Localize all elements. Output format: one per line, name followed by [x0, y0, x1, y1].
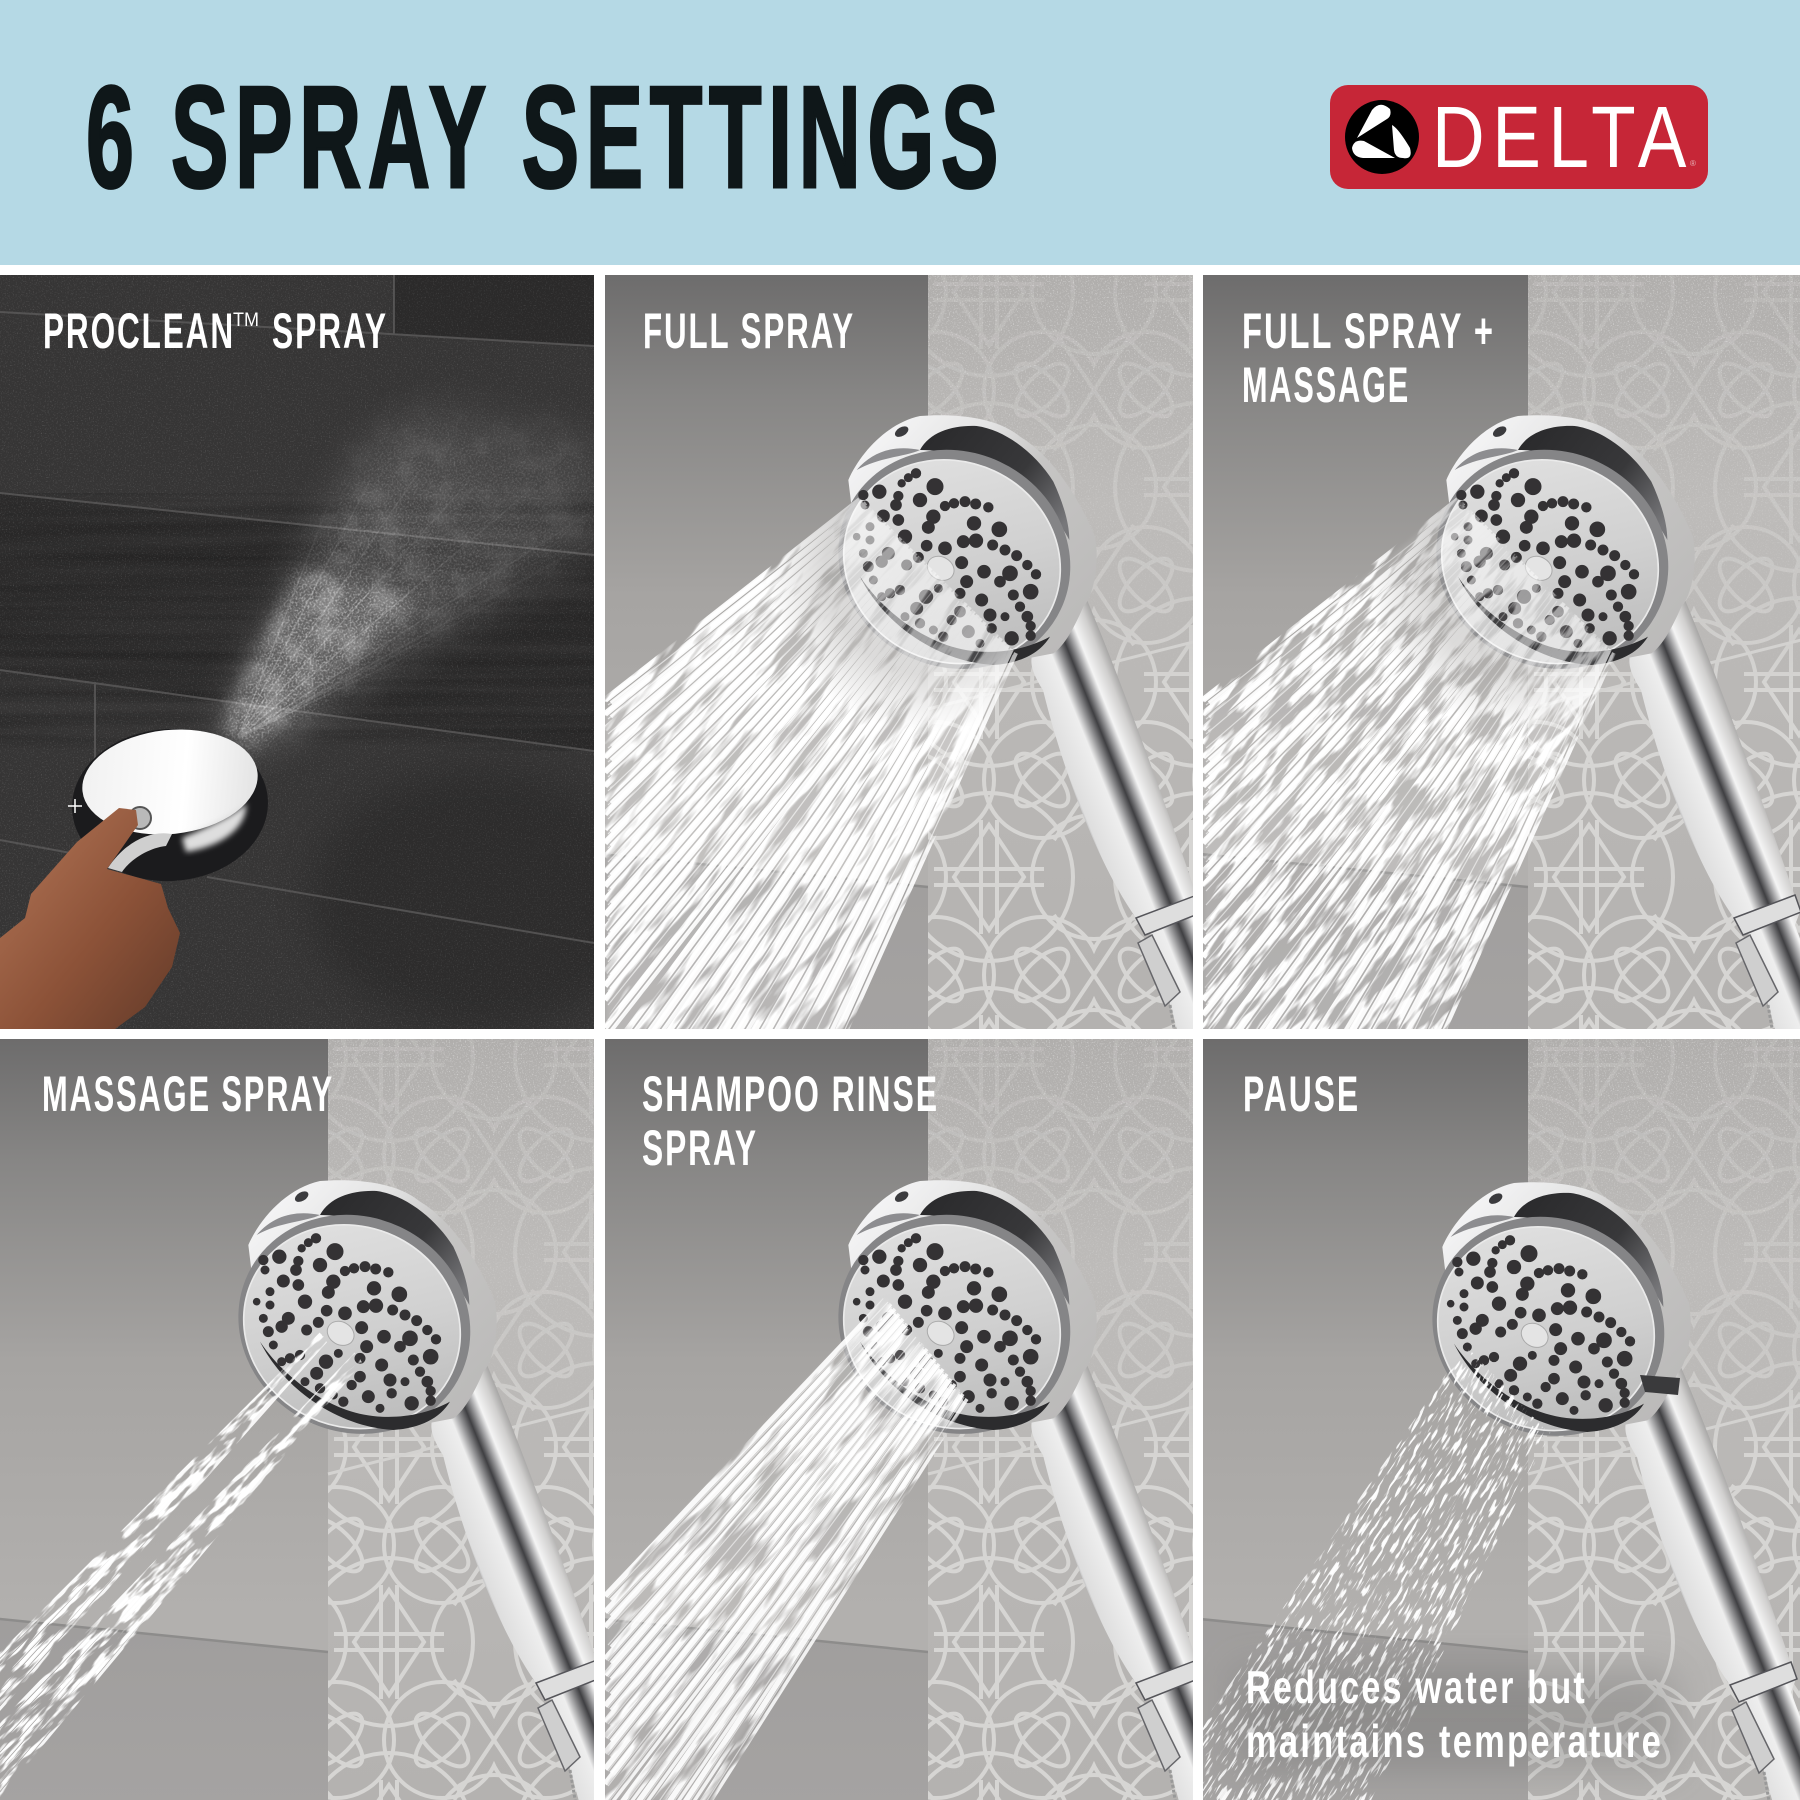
logo: Delta — [1330, 85, 1708, 189]
panel: Massage spray — [0, 1039, 594, 1800]
hand — [0, 808, 180, 1029]
shower head scene — [1190, 1035, 1800, 1800]
water spray — [1198, 500, 1614, 1045]
water jets — [0, 1334, 361, 1797]
registered mark: ® — [1690, 159, 1696, 168]
dark tile wall — [0, 275, 650, 1030]
shower head scene — [590, 270, 1213, 1045]
shower head scene — [590, 1035, 1213, 1800]
note: reduces water: Reduces water but — [1246, 1661, 1587, 1713]
label: ProClean spray: SPRAY — [272, 303, 388, 359]
logo wordmark: DELTA — [1432, 89, 1694, 186]
panel: Pause — [1203, 1039, 1800, 1800]
water spray — [600, 500, 1016, 1045]
label: ProClean spray: PROCLEAN — [43, 303, 235, 359]
panel: Shampoo rinse spray — [605, 1039, 1193, 1800]
label: Shampoo rinse spray — [642, 1066, 939, 1176]
note: reduces water — [1246, 1661, 1663, 1767]
label: Full spray: FULL SPRAY — [643, 303, 855, 359]
panel: Full spray + massage — [1203, 275, 1800, 1029]
label: Shampoo rinse spray: SPRAY — [642, 1120, 758, 1176]
label: ProClean spray: TM — [233, 310, 259, 331]
chrome shower head held in hand — [68, 721, 272, 886]
header band — [0, 0, 1800, 265]
water spray — [605, 1300, 967, 1800]
label: Pause: PAUSE — [1243, 1066, 1360, 1122]
icon: Delta triangle mark — [1345, 100, 1419, 174]
water droplets — [1203, 1350, 1550, 1800]
shower head scene — [0, 1035, 613, 1800]
title: 6 SPRAY SETTINGS — [86, 56, 1005, 218]
icon: pause lever — [1640, 1375, 1680, 1395]
label: Massage spray: MASSAGE SPRAY — [42, 1066, 334, 1122]
shadow behind note — [1235, 1670, 1675, 1770]
label: Full spray + massage — [1242, 303, 1495, 413]
label: Shampoo rinse spray: SHAMPOO RINSE — [642, 1066, 939, 1122]
mist spray — [206, 400, 594, 765]
shower head scene — [1190, 270, 1800, 1045]
panel: Full spray — [605, 275, 1193, 1029]
panel: ProClean spray — [0, 275, 594, 1029]
label: Full spray + massage: MASSAGE — [1242, 357, 1410, 413]
label: Full spray + massage: FULL SPRAY + — [1242, 303, 1495, 359]
note: reduces water: maintains temperature — [1246, 1715, 1663, 1767]
